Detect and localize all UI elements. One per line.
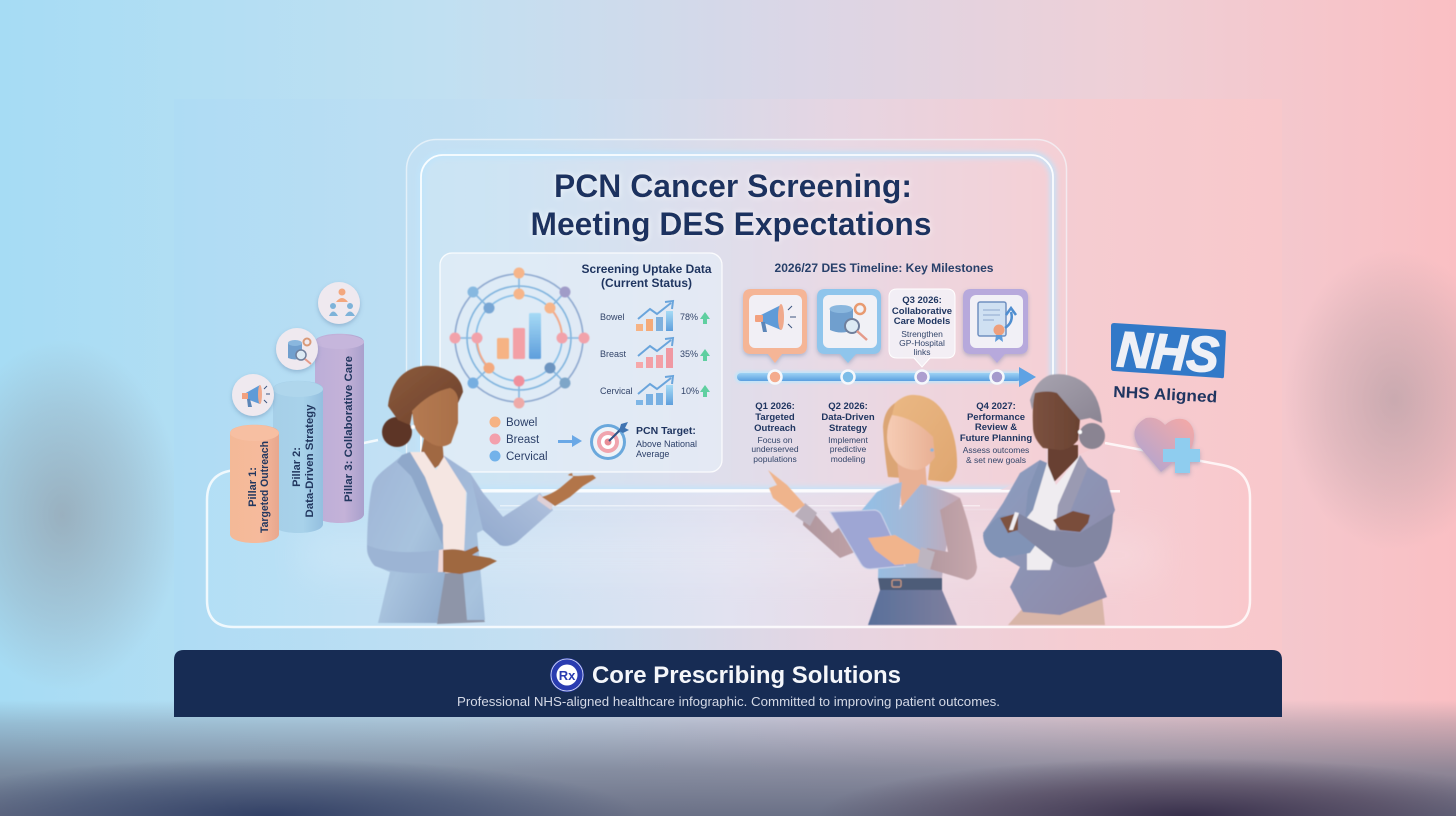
text: Q1 2026: Outreach xyxy=(754,423,796,434)
pillar 2: data-driven strategy: Pillar 2: xyxy=(291,447,303,487)
card: Q3 collaborative care xyxy=(889,289,955,367)
callout: PCN target: Above National xyxy=(636,439,697,449)
heading: screening uptake xyxy=(582,262,712,290)
icon: megaphone badge xyxy=(232,374,274,416)
panel: screening uptake data xyxy=(440,253,722,472)
row: bowel: 78% xyxy=(680,312,698,322)
text: Q4 2027 xyxy=(960,401,1032,465)
pillar 2: data-driven strategy: Data-Driven Strategy xyxy=(304,404,316,517)
row: breast: Breast xyxy=(600,349,627,359)
NHS logo: NHS xyxy=(1115,321,1221,383)
figure: blonde colleague with tablet xyxy=(768,395,977,625)
row: cervical: 10% xyxy=(681,386,699,396)
pillar 1: targeted outreach: Pillar 1: xyxy=(247,467,259,507)
stage platform xyxy=(207,440,1250,627)
text: Q2 2026 xyxy=(821,401,875,464)
pillar 3: collaborative care: Pillar 3: Collaborative Care xyxy=(343,356,355,502)
arrow: legend to target xyxy=(558,435,582,447)
card: Q3 collaborative care: links xyxy=(913,347,931,357)
text: Q2 2026: Data-Driven xyxy=(821,412,875,423)
card: Q3 collaborative care: Strengthen xyxy=(901,329,943,339)
callout: PCN target: PCN Target: xyxy=(636,425,696,437)
footer banner xyxy=(174,650,1282,717)
text: Q1 2026: Targeted xyxy=(755,412,795,423)
card: Q4 review icon xyxy=(963,289,1028,363)
pillar 3: collaborative care xyxy=(315,334,364,523)
text: Q4 2027: Performance xyxy=(967,412,1025,423)
pillars xyxy=(230,282,364,543)
icon: collaboration badge xyxy=(318,282,360,324)
text: Q2 2026: Q2 2026: xyxy=(828,401,868,412)
text: Q4 2027: & set new goals xyxy=(966,455,1026,465)
title: Meeting DES Expectations xyxy=(530,206,932,242)
legend xyxy=(490,416,548,463)
card: Q3 collaborative care: Collaborative xyxy=(892,306,952,317)
heading: timeline: 2026/27 DES Timeline: Key Milestones xyxy=(774,263,994,275)
label: NHS aligned: NHS Aligned xyxy=(1113,384,1218,406)
text: Q2 2026: modeling xyxy=(831,454,866,464)
legend: Cervical xyxy=(506,451,548,463)
text: Q2 2026: Implement xyxy=(828,435,868,445)
card: Q3 collaborative care: Care Models xyxy=(894,316,950,327)
pillar 1: targeted outreach: Targeted Outreach xyxy=(259,441,271,533)
card: Q1 outreach icon xyxy=(743,289,807,363)
row: cervical: Cervical xyxy=(600,386,633,396)
text: Q1 2026 xyxy=(751,401,799,464)
glass display frame xyxy=(406,140,1066,510)
card: Q2 data icon xyxy=(817,289,881,363)
card: Q3 collaborative care: Q3 2026: xyxy=(902,295,942,306)
text: Q4 2027: Review & xyxy=(975,422,1017,433)
card: Q3 collaborative care: GP-Hospital xyxy=(899,338,945,348)
figure: grey-haired colleague with arms crossed xyxy=(983,374,1115,625)
pillar 1: targeted outreach xyxy=(230,425,279,543)
logo: Rx badge: Rx xyxy=(559,668,576,683)
text: Q1 2026: populations xyxy=(753,454,797,464)
row: breast xyxy=(600,338,710,368)
title xyxy=(530,168,932,242)
brand name: Core Prescribing Solutions xyxy=(592,662,901,689)
heading: screening uptake: Screening Uptake Data xyxy=(582,262,712,276)
text: Q2 2026: Strategy xyxy=(829,423,868,434)
text: Q2 2026: predictive xyxy=(830,444,866,454)
callout: PCN target xyxy=(636,425,697,459)
text: Q4 2027: Future Planning xyxy=(960,433,1032,444)
text: Q1 2026: underserved xyxy=(751,444,799,454)
tagline: Professional NHS-aligned healthcare infographic. Committed to improving patient outcomes. xyxy=(457,694,1000,709)
logo: Rx badge xyxy=(550,658,584,692)
heading: screening uptake: (Current Status) xyxy=(601,276,692,290)
main illustration panel xyxy=(174,99,1282,659)
row: breast: 35% xyxy=(680,349,698,359)
text: Q1 2026: Focus on xyxy=(758,435,793,445)
text: Q4 2027: Q4 2027: xyxy=(976,401,1016,412)
chart: radial network xyxy=(450,268,590,408)
figure: presenter with brown hair xyxy=(367,366,596,624)
callout: PCN target: Average xyxy=(636,449,669,459)
timeline milestones xyxy=(735,289,1036,465)
pillar 2: data-driven strategy xyxy=(273,381,323,533)
timeline nodes xyxy=(768,370,1004,384)
legend: Bowel xyxy=(506,417,537,429)
legend: Breast xyxy=(506,434,540,446)
title: PCN Cancer Screening: xyxy=(554,168,912,204)
text: Q1 2026: Q1 2026: xyxy=(755,401,795,412)
row: bowel xyxy=(600,301,710,331)
icon: target xyxy=(590,422,629,460)
row: cervical xyxy=(600,376,710,405)
row: bowel: Bowel xyxy=(600,312,625,322)
icon: data badge xyxy=(276,328,318,370)
text: Q4 2027: Assess outcomes xyxy=(963,445,1029,455)
icon: heart and cross xyxy=(1134,418,1200,473)
timeline arrow xyxy=(735,367,1036,387)
